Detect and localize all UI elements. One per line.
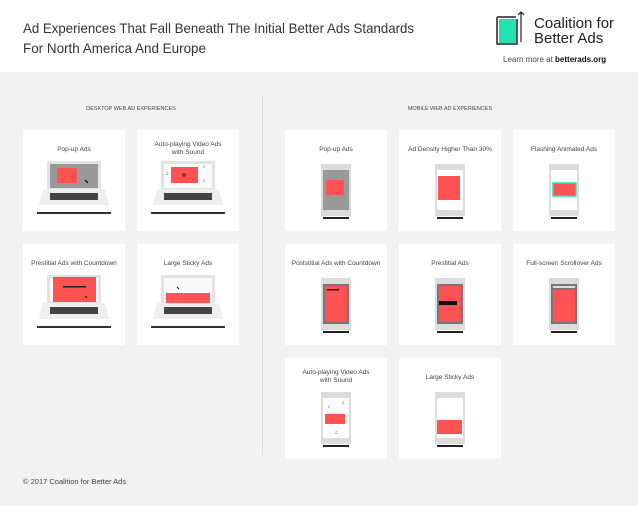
footer: © 2017 Coalition for Better Ads (23, 477, 126, 486)
card: mobile flashing animated: Flashing Animated Ads (531, 146, 598, 153)
card: mobile prestitial (399, 244, 501, 345)
card: mobile autoplay video: ♫ (341, 400, 345, 406)
card: desktop autoplay video: ♫ (165, 171, 169, 177)
title: Ad Experiences That Fall Beneath The Initial Better Ads Standards (23, 20, 414, 36)
card: mobile pop-up: Pop-up Ads (319, 146, 354, 153)
card: mobile ad density (399, 130, 501, 231)
card: desktop large sticky: Large Sticky Ads (164, 260, 213, 267)
card: desktop pop-up: Pop-up Ads (57, 146, 92, 153)
logo (497, 12, 614, 64)
card: desktop prestitial countdown (23, 244, 125, 345)
card: mobile ad density: Ad Density Higher Than 30% (408, 146, 492, 153)
header (0, 0, 638, 72)
card: mobile prestitial: Prestitial Ads (431, 260, 470, 267)
card: mobile autoplay video: ♫ (334, 430, 338, 436)
card: desktop autoplay video (137, 130, 239, 231)
card: mobile autoplay video: ♪ (328, 404, 331, 410)
card: mobile full-screen scrollover (513, 244, 615, 345)
card: mobile autoplay video: Auto-playing Video Ads (302, 369, 370, 376)
card: desktop autoplay video: ♪ (203, 178, 206, 184)
title (23, 20, 414, 56)
card: mobile poststitial countdown: Poststitial Ads with Countdown (292, 260, 381, 267)
section label: desktop: DESKTOP WEB AD EXPERIENCES (86, 106, 176, 112)
logo: Learn more at betterads.org (503, 55, 606, 64)
card: desktop large sticky (137, 244, 239, 345)
card: mobile flashing animated (513, 130, 615, 231)
card: mobile pop-up (285, 130, 387, 231)
card: mobile autoplay video: with Sound (319, 377, 352, 384)
card: desktop autoplay video: Auto-playing Video Ads (154, 141, 222, 148)
title: For North America And Europe (23, 40, 206, 56)
card: mobile full-screen scrollover: Full-screen Scrollover Ads (526, 260, 602, 267)
card: desktop pop-up (23, 130, 125, 231)
section label: mobile: MOBILE WEB AD EXPERIENCES (408, 106, 493, 112)
card: mobile poststitial countdown (285, 244, 387, 345)
card: desktop prestitial countdown: Prestitial Ads with Countdown (31, 260, 117, 267)
card: desktop autoplay video: ♪ (203, 164, 206, 170)
logo: Better Ads (534, 30, 603, 47)
logo: Coalition for (534, 15, 614, 32)
card: mobile autoplay video (285, 358, 387, 459)
card: mobile large sticky: Large Sticky Ads (426, 374, 475, 381)
card: desktop autoplay video: with Sound (171, 149, 204, 156)
card: mobile large sticky (399, 358, 501, 459)
